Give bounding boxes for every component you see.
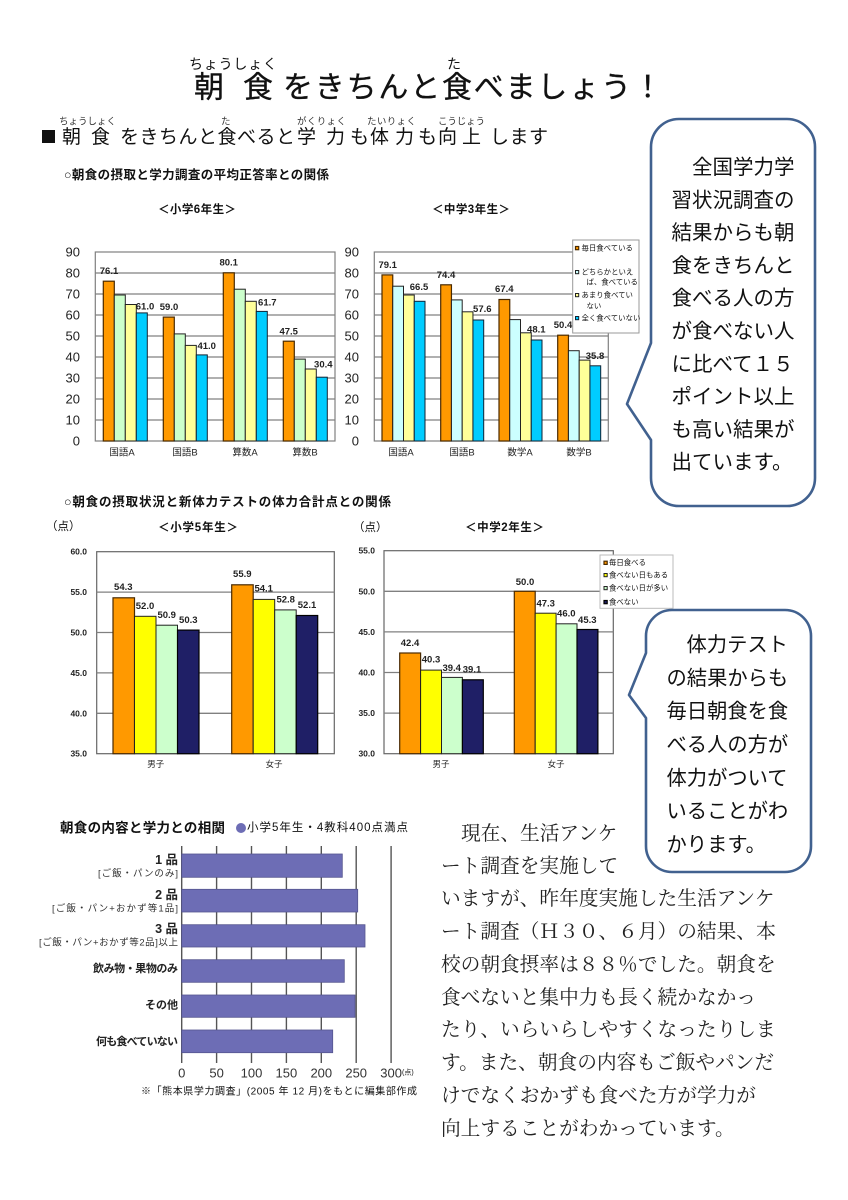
bar chart: junior high 3 academic: 80 bbox=[345, 266, 359, 280]
section heading: 力 bbox=[395, 126, 414, 148]
title: た bbox=[447, 56, 461, 72]
legend: academic charts: ない bbox=[586, 302, 601, 310]
legend: academic charts bbox=[573, 240, 640, 333]
chart label: junior high 2: ＜中学2年生＞ bbox=[465, 520, 544, 534]
horizontal bar chart: breakfast content and academic ability: [ご飯・パン+おかず等1品] bbox=[52, 902, 178, 914]
legend: fitness charts: 食べない日もある bbox=[609, 570, 668, 580]
horizontal bar chart: breakfast content and academic ability: [ご飯・パン+おかず等2品]以上 bbox=[39, 936, 178, 948]
bar chart: grade 6 academic: 80 bbox=[66, 266, 80, 280]
bar chart: junior high 3 academic: 国語A bbox=[388, 448, 414, 458]
bar chart: junior high 2 fitness: 40.3 bbox=[422, 654, 440, 666]
bar chart: junior high 2 fitness: 35.0 bbox=[358, 708, 375, 718]
bar chart: junior high 2 fitness: 42.4 bbox=[401, 638, 420, 649]
bar chart: grade 5 fitness: 45.0 bbox=[70, 668, 87, 678]
callout: fitness result: かります。 bbox=[666, 834, 766, 856]
bar chart: junior high 2 fitness: 55.0 bbox=[358, 546, 375, 556]
legend: fitness charts: 毎日食べる bbox=[609, 558, 646, 567]
bar chart: junior high 2 fitness: 39.4 bbox=[442, 663, 462, 674]
section heading: こうじょう bbox=[438, 116, 485, 128]
body paragraph: 向上することがわかっています。 bbox=[441, 1118, 735, 1140]
body paragraph: いますが、昨年度実施した生活アンケ bbox=[441, 888, 775, 910]
bar chart: grade 5 fitness: 50.3 bbox=[179, 615, 198, 626]
body paragraph: たり、いらいらしやすくなったりしま bbox=[441, 1019, 776, 1041]
bar chart: grade 6 academic: 国語A bbox=[109, 448, 135, 458]
callout: fitness result: の結果からも bbox=[666, 667, 788, 690]
body paragraph bbox=[441, 823, 776, 1140]
horizontal bar chart: breakfast content and academic ability bbox=[39, 820, 417, 1098]
section heading: も bbox=[418, 127, 437, 148]
source note: ※「熊本県学力調査」(2005 年 12 月)をもとに編集部作成 bbox=[141, 1084, 417, 1098]
horizontal bar chart: breakfast content and academic ability: 150 bbox=[276, 1066, 297, 1080]
callout: academic result: 全国学力学 bbox=[692, 156, 794, 179]
chart legend: 小学5年生・4教科400点満点 bbox=[247, 820, 408, 834]
bar chart: grade 6 academic: 61.7 bbox=[258, 298, 277, 308]
legend: fitness charts bbox=[600, 555, 673, 608]
bar chart: grade 6 academic: 30.4 bbox=[314, 360, 333, 370]
bar chart: junior high 3 academic: 35.8 bbox=[586, 351, 604, 362]
bar chart: junior high 3 academic: 50.4 bbox=[554, 320, 573, 331]
legend: fitness charts: 食べない日が多い bbox=[609, 584, 668, 592]
bar chart: junior high 3 academic: 数学A bbox=[507, 446, 533, 458]
bar chart: junior high 3 academic: 50 bbox=[345, 328, 359, 344]
bar chart: grade 6 academic: 60 bbox=[66, 308, 80, 322]
bar chart: junior high 3 academic: 30 bbox=[345, 370, 359, 386]
callout: fitness result: いることがわ bbox=[666, 800, 788, 823]
section heading bbox=[42, 116, 549, 148]
bar chart: junior high 3 academic: 79.1 bbox=[378, 260, 398, 271]
title bbox=[189, 56, 665, 104]
bar chart: grade 6 academic: 国語B bbox=[172, 448, 198, 458]
horizontal bar chart: breakfast content and academic ability: 200 bbox=[310, 1066, 332, 1080]
bar chart: junior high 2 fitness: 50.0 bbox=[358, 586, 375, 596]
bar chart: junior high 2 fitness: 女子 bbox=[547, 759, 565, 769]
chart title: 朝食の内容と学力との相関 bbox=[60, 820, 225, 836]
legend: fitness charts: 食べない bbox=[609, 598, 639, 606]
unit label left: （点） bbox=[46, 520, 80, 533]
bar chart: grade 6 academic: 20 bbox=[66, 392, 80, 406]
bar chart: junior high 2 fitness: 40.0 bbox=[358, 668, 375, 678]
bar chart: grade 6 academic: 算数B bbox=[292, 446, 318, 458]
body paragraph: ート調査（Ｈ３０、６月）の結果、本 bbox=[441, 921, 776, 943]
bar chart: junior high 3 academic bbox=[345, 244, 608, 458]
legend: academic charts: どちらかといえ bbox=[582, 268, 633, 276]
bar chart: junior high 2 fitness: 30.0 bbox=[358, 749, 375, 759]
callout: academic result: 出ています。 bbox=[672, 451, 792, 474]
horizontal bar chart: breakfast content and academic ability: その他 bbox=[145, 998, 178, 1012]
chart label: junior high 3: ＜中学3年生＞ bbox=[432, 202, 510, 216]
bar chart: grade 6 academic: 41.0 bbox=[197, 341, 216, 352]
chart label: grade 6: ＜小学6年生＞ bbox=[158, 202, 236, 216]
bar chart: grade 6 academic: 70 bbox=[66, 286, 80, 302]
bar chart: grade 5 fitness: 35.0 bbox=[70, 749, 87, 759]
callout: academic result: ポイント以上 bbox=[672, 386, 794, 409]
body paragraph: 現在、生活アンケ bbox=[461, 823, 617, 845]
horizontal bar chart: breakfast content and academic ability: 250 bbox=[345, 1066, 367, 1080]
section heading: 体 bbox=[370, 126, 389, 148]
bar chart: grade 6 academic: 61.0 bbox=[136, 302, 154, 312]
subheading: fitness test: ○朝食の摂取状況と新体力テストの体力合計点との関係 bbox=[64, 494, 391, 509]
bar chart: grade 6 academic: 30 bbox=[66, 370, 80, 386]
subheading: academic survey: ○朝食の摂取と学力調査の平均正答率との関係 bbox=[64, 167, 329, 182]
bar chart: junior high 3 academic: 70 bbox=[345, 286, 359, 302]
bar chart: junior high 3 academic: 60 bbox=[345, 308, 359, 322]
section heading: をきちんと食べると bbox=[120, 126, 296, 148]
horizontal bar chart: breakfast content and academic ability: 1 品 bbox=[155, 853, 178, 867]
horizontal bar chart: breakfast content and academic ability: 3 品 bbox=[155, 922, 178, 936]
bar chart: grade 6 academic: 40 bbox=[66, 350, 80, 364]
bar chart: grade 5 fitness: 60.0 bbox=[70, 547, 87, 557]
bar chart: junior high 3 academic: 10 bbox=[345, 412, 359, 428]
bar chart: grade 6 academic: 47.5 bbox=[279, 326, 299, 338]
body paragraph: 食べないと集中力も長く続かなかっ bbox=[441, 987, 756, 1009]
bar chart: grade 5 fitness: 女子 bbox=[265, 759, 283, 769]
bar chart: junior high 3 academic: 20 bbox=[345, 392, 359, 406]
callout: fitness result bbox=[629, 610, 811, 872]
callout: fitness result: 体力テスト bbox=[686, 634, 788, 656]
section heading: たいりょく bbox=[367, 116, 416, 128]
body paragraph: す。また、朝食の内容もご飯やパンだ bbox=[441, 1052, 774, 1074]
section heading: します bbox=[490, 127, 549, 148]
bar chart: grade 5 fitness: 男子 bbox=[147, 759, 165, 769]
bar chart: grade 5 fitness: 54.1 bbox=[254, 584, 274, 594]
bar chart: grade 5 fitness: 52.1 bbox=[298, 600, 317, 611]
bar chart: junior high 3 academic: 48.1 bbox=[527, 324, 546, 336]
horizontal bar chart: breakfast content and academic ability: 50 bbox=[209, 1066, 224, 1080]
bar chart: junior high 3 academic: 90 bbox=[345, 244, 359, 260]
bar chart: grade 5 fitness: 55.0 bbox=[70, 587, 87, 597]
title: 朝 bbox=[194, 72, 224, 104]
body paragraph: けでなくおかずも食べた方が学力が bbox=[441, 1085, 756, 1107]
bar chart: junior high 3 academic: 数学B bbox=[566, 446, 592, 458]
bar chart: grade 6 academic: 算数A bbox=[232, 446, 258, 458]
bar chart: grade 6 academic: 10 bbox=[66, 412, 80, 428]
section heading: 学 bbox=[297, 126, 316, 148]
callout: fitness result: 体力がついて bbox=[666, 767, 788, 790]
bar chart: junior high 2 fitness: 45.3 bbox=[578, 615, 597, 626]
bar chart: grade 5 fitness bbox=[70, 547, 334, 769]
horizontal bar chart: breakfast content and academic ability: 300 bbox=[380, 1066, 402, 1080]
bar chart: junior high 2 fitness: 39.1 bbox=[463, 664, 482, 676]
callout: academic result: 結果からも朝 bbox=[672, 222, 794, 245]
body paragraph: 校の朝食摂率は８８％でした。朝食を bbox=[441, 953, 776, 976]
bar chart: junior high 3 academic: 57.6 bbox=[473, 304, 492, 315]
bar chart: junior high 3 academic: 国語B bbox=[449, 448, 475, 458]
callout: academic result: に比べて１５ bbox=[672, 353, 794, 376]
callout: academic result bbox=[627, 119, 815, 506]
bar chart: grade 5 fitness: 55.9 bbox=[233, 569, 252, 580]
bar chart: junior high 2 fitness: 男子 bbox=[432, 759, 450, 769]
section heading: も bbox=[350, 127, 369, 148]
section heading: 食 bbox=[91, 126, 110, 148]
section heading: 朝 bbox=[62, 126, 81, 148]
callout: fitness result: べる人の方が bbox=[666, 734, 788, 756]
bar chart: grade 5 fitness: 52.0 bbox=[136, 601, 154, 612]
legend: academic charts: あまり食べてい bbox=[582, 290, 633, 300]
callout: academic result: も高い結果が bbox=[672, 418, 794, 441]
legend: academic charts: 全く食べていない bbox=[582, 314, 640, 322]
callout: academic result: 食べる人の方 bbox=[672, 287, 794, 310]
bar chart: grade 6 academic: 80.1 bbox=[219, 258, 239, 268]
bar chart: grade 6 academic: 50 bbox=[66, 328, 80, 344]
title: 食 bbox=[243, 72, 273, 104]
bar chart: grade 5 fitness: 40.0 bbox=[70, 708, 87, 718]
bar chart: grade 5 fitness: 54.3 bbox=[114, 582, 133, 593]
section heading: ちょうしょく bbox=[59, 116, 116, 128]
bar chart: grade 5 fitness: 50.0 bbox=[70, 628, 87, 638]
title: をきちんと食べましょう！ bbox=[283, 72, 665, 104]
bar chart: grade 6 academic: 76.1 bbox=[100, 266, 119, 277]
bar chart: grade 6 academic: 90 bbox=[66, 244, 80, 260]
bar chart: junior high 2 fitness: 45.0 bbox=[358, 627, 375, 637]
legend: academic charts: ば、食べている bbox=[586, 278, 638, 286]
callout: academic result: が食べない人 bbox=[672, 320, 794, 343]
bar chart: junior high 3 academic: 40 bbox=[345, 350, 359, 364]
horizontal bar chart: breakfast content and academic ability: 0 bbox=[178, 1066, 185, 1080]
section heading: がくりょく bbox=[297, 116, 346, 128]
section heading: 向 bbox=[438, 126, 457, 148]
horizontal bar chart: breakfast content and academic ability: 何も食べていない bbox=[96, 1034, 178, 1048]
bar chart: grade 6 academic: 0 bbox=[73, 434, 80, 448]
chart label: grade 5: ＜小学5年生＞ bbox=[158, 520, 238, 534]
bar chart: junior high 3 academic: 0 bbox=[352, 434, 359, 448]
bar chart: grade 6 academic: 59.0 bbox=[160, 302, 178, 313]
bar chart: junior high 3 academic: 74.4 bbox=[437, 270, 456, 281]
section heading: た bbox=[221, 116, 231, 128]
callout: academic result: 習状況調査の bbox=[672, 189, 794, 212]
bar chart: grade 5 fitness: 52.8 bbox=[276, 594, 295, 606]
bar chart: junior high 2 fitness bbox=[358, 546, 613, 769]
bar chart: junior high 3 academic: 67.4 bbox=[495, 284, 514, 295]
horizontal bar chart: breakfast content and academic ability: (点) bbox=[402, 1068, 414, 1076]
legend: academic charts: 毎日食べている bbox=[582, 244, 633, 252]
section heading: 上 bbox=[462, 126, 481, 148]
bar chart: junior high 2 fitness: 46.0 bbox=[557, 608, 576, 620]
bar chart: grade 6 academic bbox=[66, 244, 335, 458]
unit label right: （点） bbox=[353, 521, 388, 534]
bar chart: junior high 2 fitness: 50.0 bbox=[516, 577, 534, 588]
callout: academic result: 食をきちんと bbox=[672, 254, 794, 277]
horizontal bar chart: breakfast content and academic ability: 飲み物・果物のみ bbox=[93, 961, 178, 975]
bar chart: junior high 2 fitness: 47.3 bbox=[536, 598, 555, 610]
section heading: 力 bbox=[326, 126, 345, 148]
bar chart: grade 5 fitness: 50.9 bbox=[157, 610, 176, 621]
bar chart: junior high 3 academic: 66.5 bbox=[410, 282, 429, 293]
body paragraph: ート調査を実施して bbox=[441, 856, 618, 878]
horizontal bar chart: breakfast content and academic ability: 100 bbox=[241, 1066, 262, 1080]
title: ちょうしょく bbox=[189, 56, 277, 72]
horizontal bar chart: breakfast content and academic ability: [ご飯・パンのみ] bbox=[98, 868, 178, 880]
callout: fitness result: 毎日朝食を食 bbox=[666, 700, 788, 723]
horizontal bar chart: breakfast content and academic ability: 2 品 bbox=[155, 888, 178, 902]
